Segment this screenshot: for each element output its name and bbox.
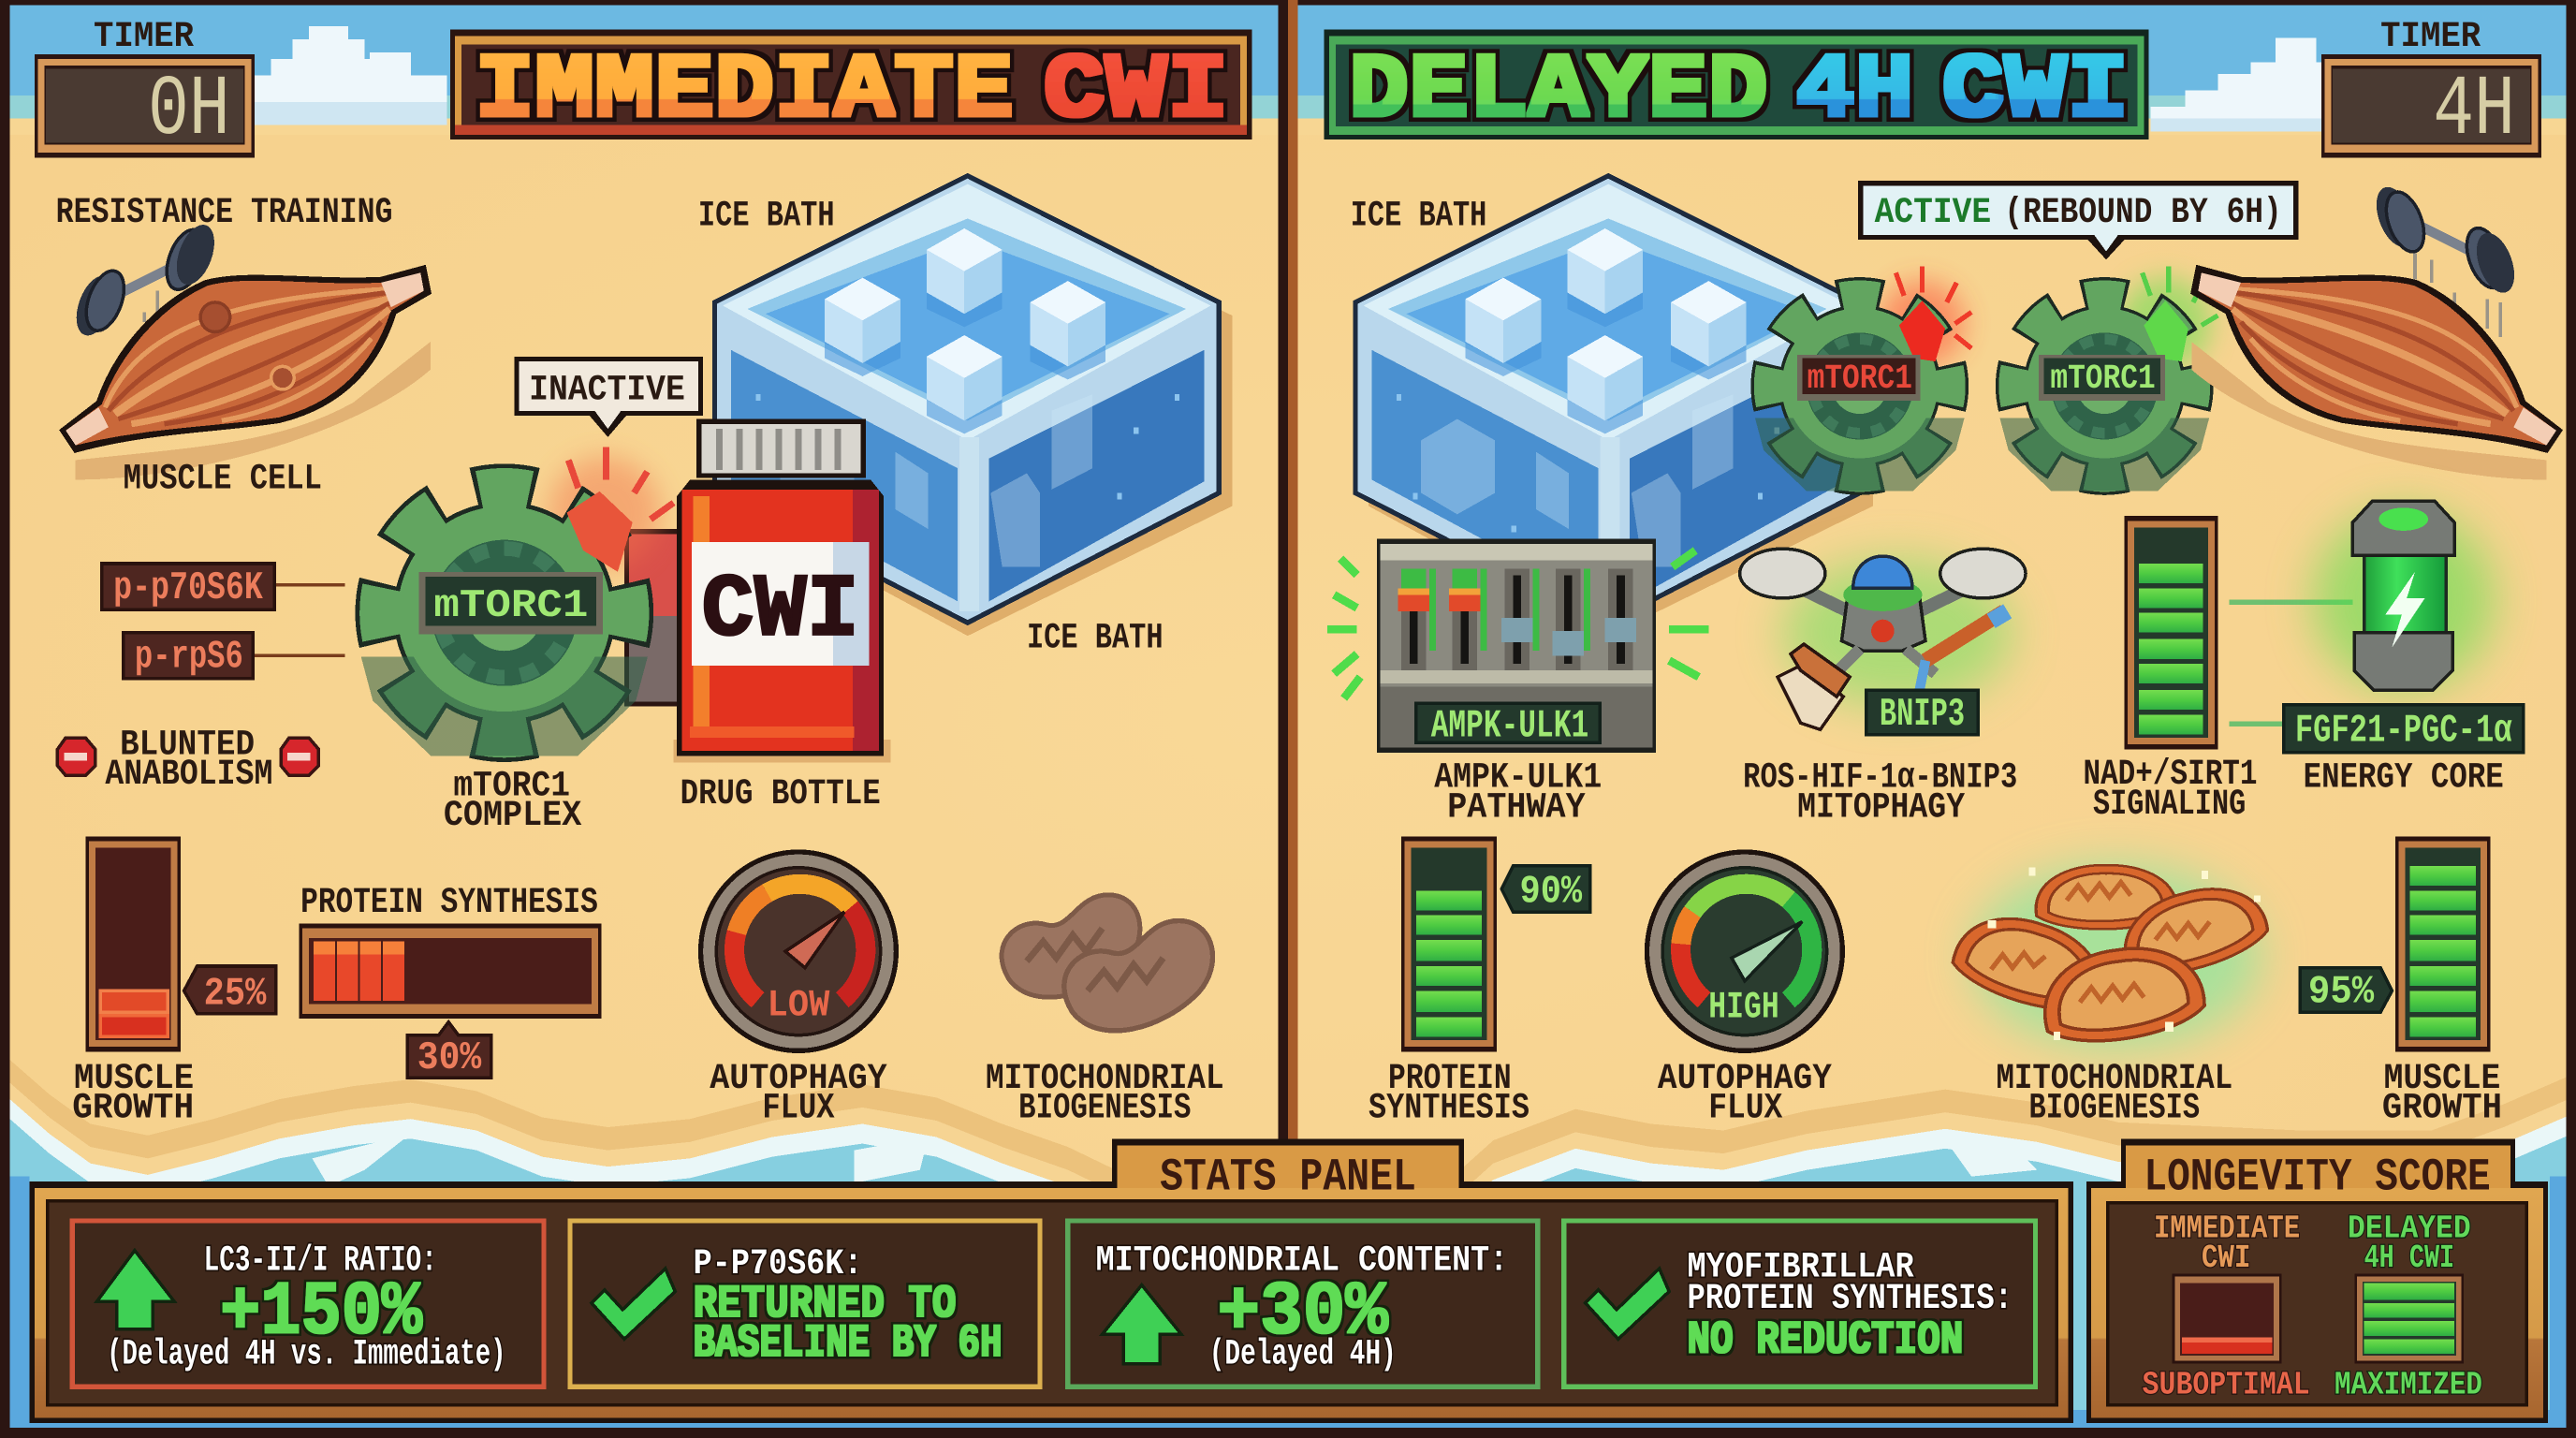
column label: immediate: CWI (2202, 1240, 2250, 1278)
column label: immediate: IMMEDIATE (2154, 1211, 2300, 1249)
stat card: p-p70S6K (570, 1221, 1040, 1387)
timer right (2321, 54, 2541, 159)
label: ice bath top: ICE BATH (698, 196, 835, 237)
gauge: autophagy high (1645, 849, 1845, 1053)
cloud right (2150, 37, 2339, 131)
red spark marks (1895, 266, 1971, 348)
text: blunted anabolism (105, 725, 272, 795)
stat card: LC3-II/I: (Delayed 4H vs. Immediate) (107, 1334, 506, 1375)
column label: delayed (2348, 1211, 2471, 1278)
icon: check (1586, 1269, 1669, 1339)
label: NAD+/SIRT1 signaling: NAD+/SIRT1 (2083, 755, 2258, 795)
title: delayed 4H CWI: 4H (1795, 39, 1914, 143)
heading: longevity score: LONGEVITY SCORE (2144, 1153, 2491, 1204)
cloud left (255, 26, 446, 125)
callout: active rebound: (REBOUND BY 6H) (2004, 192, 2282, 233)
title: delayed 4H CWI (1325, 30, 2149, 143)
icon: check (592, 1269, 675, 1339)
label: AMPK-ULK1 pathway: AMPK-ULK1 (1434, 757, 1602, 799)
callout: inactive: INACTIVE (529, 370, 685, 411)
gauge: autophagy low (698, 849, 899, 1053)
labels: bottom row right (1368, 1058, 2502, 1129)
callout: active rebound: ACTIVE (1875, 192, 1991, 233)
gauge: autophagy high: HIGH (1708, 986, 1779, 1029)
label: mTORC1 complex: COMPLEX (444, 795, 583, 836)
label: drug bottle: DRUG BOTTLE (681, 774, 881, 815)
icon: up arrow (1103, 1284, 1181, 1364)
label: mitochondrial biogenesis left: MITOCHONDRIAL (986, 1058, 1224, 1099)
timer left (35, 54, 255, 159)
text: blunted anabolism: BLUNTED (120, 725, 255, 766)
icon: mTORC1 gear red: mTORC1 (1808, 361, 1912, 399)
connector lines (2230, 600, 2352, 726)
tag: 90%: 90% (1519, 871, 1583, 916)
tag: 25%: 25% (204, 973, 267, 1017)
label: NAD+/SIRT1 signaling: SIGNALING (2093, 784, 2246, 825)
stat card: p-p70S6K: P-P70S6K: (694, 1244, 862, 1284)
bar: protein synthesis 90% (1401, 836, 1497, 1051)
icon: BNIP3 drone: BNIP3 (1880, 694, 1965, 738)
tag: FGF21-PGC-1α: FGF21-PGC-1α (2295, 710, 2512, 755)
panel: immediate CWI (35, 17, 1251, 1129)
icon: glowing mitochondria (1947, 864, 2273, 1049)
tag: 30% (407, 1022, 491, 1081)
heading: stats panel: STATS PANEL (1160, 1153, 1416, 1204)
icon: barbell (69, 220, 222, 341)
illustration: drug bottle (674, 419, 890, 762)
illustration: muscle right (2191, 268, 2559, 479)
icon: AMPK-ULK1 mixer panel: AMPK-ULK1 (1431, 705, 1588, 749)
label: muscle cell: MUSCLE CELL (124, 459, 322, 500)
column label: delayed: 4H CWI (2364, 1240, 2454, 1278)
stat card: mitochondrial content (1068, 1221, 1538, 1387)
bar: NAD+/SIRT1 (2124, 516, 2217, 749)
stat card: myofibrillar: NO REDUCTION (1687, 1316, 1963, 1367)
label: mTORC1 complex: mTORC1 (453, 766, 570, 807)
callout: active rebound (1858, 181, 2298, 259)
icon: AMPK-ULK1 mixer panel (1327, 539, 1708, 753)
stat card: mitochondrial content: MITOCHONDRIAL CONTENT: (1096, 1240, 1508, 1282)
timer label left: TIMER (94, 17, 195, 57)
tag: 30%: 30% (417, 1036, 482, 1081)
tag: p-rpS6 (124, 633, 345, 681)
icon: mTORC1 gear green: mTORC1 (2050, 361, 2156, 399)
icon: mTORC1 gear inactive: mTORC1 (433, 585, 588, 629)
connector between gear and bottle (624, 529, 681, 707)
labels: bottom row right: BIOGENESIS (2029, 1088, 2200, 1129)
bar: maximized (2356, 1275, 2463, 1362)
bar: muscle growth 25% (85, 836, 181, 1051)
stat card: p-p70S6K: BASELINE BY 6H (694, 1319, 1003, 1371)
stat card: LC3-II/I: +150% (220, 1270, 423, 1356)
illustration: ice bath right (1355, 176, 1873, 636)
bar: muscle growth 95% (2395, 836, 2491, 1051)
title: immediate CWI (450, 30, 1251, 143)
icon: dull mitochondria (992, 888, 1227, 1044)
label: muscle growth: GROWTH (72, 1088, 194, 1129)
column label: immediate (2154, 1211, 2300, 1278)
stat card: mitochondrial content: +30% (1218, 1270, 1389, 1356)
callout: inactive (514, 357, 703, 437)
timer left: 0H (148, 63, 230, 159)
label: ice bath lower: ICE BATH (1027, 618, 1164, 659)
text: blunted anabolism: ANABOLISM (105, 755, 272, 795)
label: mitochondrial biogenesis left: BIOGENESIS (1018, 1088, 1191, 1129)
stat card: myofibrillar: MYOFIBRILLAR (1687, 1247, 1915, 1288)
illustration: muscle cell (63, 268, 431, 479)
label: energy core: ENERGY CORE (2304, 757, 2504, 799)
tag: p-p70S6K: p-p70S6K (113, 567, 264, 611)
label: AMPK-ULK1 pathway: PATHWAY (1447, 787, 1587, 829)
label: AMPK-ULK1 pathway (1434, 757, 1602, 829)
icon: stop right (281, 738, 318, 775)
panel: delayed 4H CWI (1325, 17, 2559, 1129)
icon: mTORC1 gear red (1755, 281, 1965, 491)
stat card: mitochondrial content: (Delayed 4H) (1209, 1334, 1397, 1375)
text: suboptimal: SUBOPTIMAL (2143, 1367, 2310, 1405)
inactive spark marks (568, 447, 674, 520)
labels: bottom row right: MUSCLE (2384, 1058, 2500, 1099)
label: muscle growth (72, 1058, 194, 1129)
stat card: myofibrillar: PROTEIN SYNTHESIS: (1687, 1278, 2012, 1319)
icon: energy core (2313, 501, 2494, 690)
centre divider (1278, 0, 1298, 1151)
label: ROS-HIF mitophagy (1743, 757, 2017, 829)
icon: mTORC1 gear inactive (361, 457, 661, 756)
icon: BNIP3 drone (1740, 549, 2026, 738)
labels: bottom row right: SYNTHESIS (1368, 1088, 1530, 1129)
illustration: ice bath (714, 176, 1232, 636)
labels: bottom row right: FLUX (1708, 1088, 1783, 1129)
labels: bottom row right: MITOCHONDRIAL (1996, 1058, 2232, 1099)
panel: longevity score (2086, 1138, 2548, 1423)
title: immediate CWI: IMMEDIATE (475, 39, 1014, 143)
tag: 25% (184, 966, 276, 1017)
stat card: myofibrillar (1564, 1221, 2036, 1387)
bar: protein synthesis 30% (299, 923, 601, 1019)
stat card: LC3-II/I (72, 1221, 544, 1387)
icon: stop left (57, 738, 95, 775)
label: ROS-HIF mitophagy: ROS-HIF-1α-BNIP3 (1743, 757, 2017, 799)
label: autophagy flux left (710, 1058, 888, 1129)
labels: bottom row right: AUTOPHAGY (1658, 1058, 1833, 1099)
icon: mTORC1 gear green (1999, 278, 2211, 491)
tag: p-rpS6: p-rpS6 (135, 636, 243, 681)
timer label right: TIMER (2380, 17, 2481, 57)
label: mitochondrial biogenesis left (986, 1058, 1224, 1129)
title: immediate CWI: CWI (1043, 39, 1229, 143)
icon: barbell right (2369, 182, 2522, 337)
icon: up arrow (97, 1251, 174, 1329)
label: NAD+/SIRT1 signaling (2083, 755, 2258, 825)
label: autophagy flux left: FLUX (762, 1088, 836, 1129)
label: muscle growth: MUSCLE (74, 1058, 194, 1099)
stat card: p-p70S6K: RETURNED TO (694, 1280, 956, 1331)
column label: delayed: DELAYED (2348, 1211, 2471, 1249)
labels: bottom row right: GROWTH (2382, 1088, 2502, 1129)
label: mTORC1 complex (444, 766, 583, 836)
panel: stats (30, 1138, 2073, 1423)
title: delayed 4H CWI: CWI (1942, 39, 2130, 143)
stat card: LC3-II/I: LC3-II/I RATIO: (204, 1240, 437, 1282)
longevity frame (2086, 1138, 2548, 1423)
tag: 95%: 95% (2308, 971, 2375, 1016)
label: ice bath right: ICE BATH (1351, 196, 1486, 237)
labels: bottom row right: PROTEIN (1388, 1058, 1512, 1099)
label: ROS-HIF mitophagy: MITOPHAGY (1797, 787, 1966, 829)
timer right: 4H (2433, 63, 2515, 159)
green spark marks (2143, 266, 2217, 326)
title: delayed 4H CWI: DELAYED (1349, 39, 1767, 143)
illustration: drug bottle: CWI (701, 562, 859, 662)
label: protein synthesis: PROTEIN SYNTHESIS (300, 882, 598, 923)
label: resistance training: RESISTANCE TRAINING (56, 192, 392, 233)
bar: suboptimal (2174, 1275, 2280, 1362)
label: autophagy flux left: AUTOPHAGY (710, 1058, 888, 1099)
stats frame (30, 1138, 2073, 1423)
gauge: autophagy low: LOW (768, 984, 830, 1027)
text: maximized: MAXIMIZED (2334, 1367, 2482, 1405)
